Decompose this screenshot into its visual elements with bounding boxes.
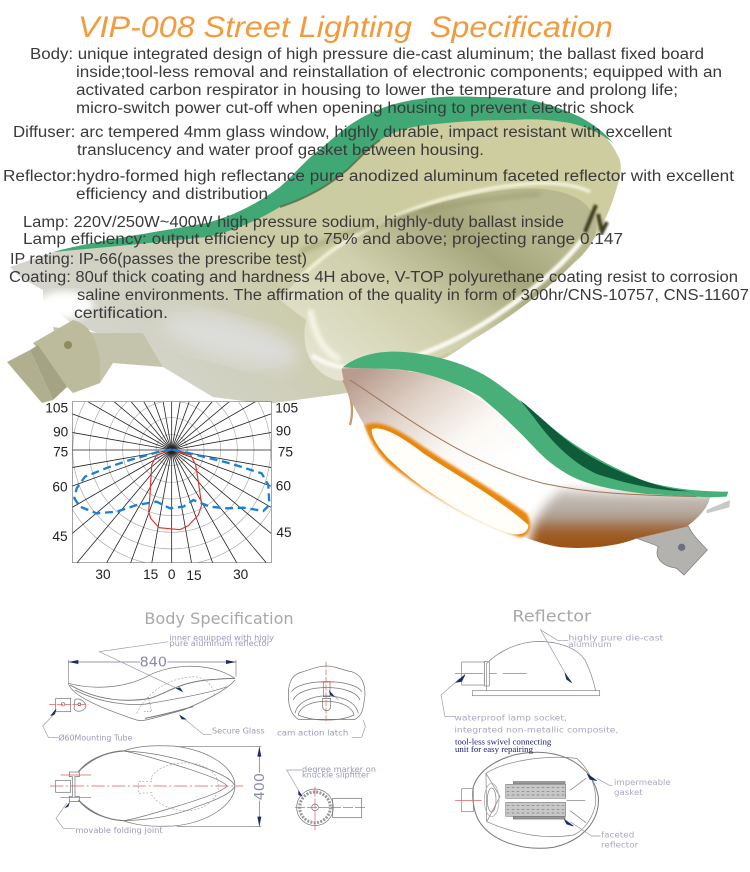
heading: reflector: Reflector xyxy=(512,606,592,625)
chart axis labels: 90 xyxy=(53,425,69,440)
lamp silver housing xyxy=(342,368,710,548)
lamp specification xyxy=(23,214,623,248)
chart axis labels: 15 xyxy=(186,568,202,583)
drawing callouts xyxy=(43,642,365,828)
coating specification: Coating: 80uf thick coating and hardness 4H above, V-TOP polyurethane coating resist to corrosion xyxy=(9,269,738,286)
chart axis labels: 105 xyxy=(275,401,298,416)
chart axis labels: 45 xyxy=(276,525,292,540)
lamp shaded right section xyxy=(523,484,710,548)
IP rating: IP rating: IP-66(passes the prescribe test) xyxy=(10,251,307,268)
body specification: micro-switch power cut-off when opening housing to prevent electric shock xyxy=(76,100,634,117)
drawing annotations: inner equipped with higly xyxy=(169,633,274,642)
front view drawing xyxy=(288,662,365,723)
diffuser specification: translucency and water proof gasket between housing. xyxy=(77,142,484,159)
reflector specification: efficiency and distribution xyxy=(76,186,268,203)
chart axis labels: 75 xyxy=(53,444,69,459)
drawing annotations: Secure Glass xyxy=(212,726,265,735)
body specification: inside;tool-less removal and reinstallation of electronic components; equipped with an xyxy=(76,64,722,81)
drawing annotations: Ø60Mounting Tube xyxy=(58,733,133,742)
reflector annotations: impermeable xyxy=(614,778,671,787)
drawing annotations: degree marker on xyxy=(302,765,376,774)
body specification drawings xyxy=(43,609,376,835)
window glow xyxy=(365,423,530,537)
chart axis labels: 75 xyxy=(278,445,293,460)
diffuser specification xyxy=(13,124,673,159)
specification text xyxy=(3,46,749,322)
drawing annotations: cam action latch xyxy=(277,729,348,738)
white glare patches xyxy=(37,291,93,319)
chart axis labels: 0 xyxy=(168,567,176,582)
blue dashed distribution curve xyxy=(74,449,269,513)
drawing annotations: knuckle slipfitter xyxy=(302,771,370,780)
coating specification xyxy=(9,269,749,322)
drawing annotations: movable folding joint xyxy=(75,826,163,835)
reflector annotations xyxy=(454,634,671,850)
lamp bracket xyxy=(637,526,707,575)
body specification: Body: unique integrated design of high pressure die-cast aluminum; the ballast fixed board xyxy=(30,46,704,63)
top view drawing xyxy=(50,746,243,826)
lamp latch xyxy=(585,205,607,232)
reflector annotations: integrated non-metallic composite, xyxy=(454,726,618,735)
lamp glass xyxy=(280,188,596,381)
diffuser specification: Diffuser: arc tempered 4mm glass window, highly durable, impact resistant with excellent xyxy=(13,124,673,141)
coating specification: saline environments. The affirmation of the quality in form of 300hr/CNS-10757, CNS-11607 xyxy=(77,287,749,304)
reflector annotations: faceted xyxy=(601,831,634,840)
reflector annotations: aluminum xyxy=(568,640,612,649)
swivel connecting note: unit for easy repairing xyxy=(455,745,533,754)
chart axis labels: 15 xyxy=(143,567,159,582)
dimension 840 xyxy=(68,656,236,683)
coating specification: certification. xyxy=(74,305,168,322)
dimension 840: 840 xyxy=(140,656,167,671)
reflector side view xyxy=(455,641,600,696)
green lamp cover xyxy=(53,96,613,252)
reflector drawings xyxy=(441,606,671,850)
lamp latch xyxy=(343,380,368,425)
lamp housing xyxy=(10,96,621,404)
green cover shadow xyxy=(520,400,690,491)
drawing annotations: pure aluminum reflector xyxy=(169,639,271,648)
reflector annotations: highly pure die-cast xyxy=(568,634,663,643)
green lamp cover xyxy=(343,352,728,497)
chart axis labels: 60 xyxy=(52,480,68,495)
chart axis labels: 30 xyxy=(95,567,111,582)
reflector specification: Reflector:hydro-formed high reflectance pure anodized aluminum faceted reflector with excellent xyxy=(3,168,735,185)
reflector specification xyxy=(3,168,735,203)
reflector callouts xyxy=(441,630,613,836)
dimension 400 xyxy=(177,747,268,827)
swivel connecting note: tool-less swivel connecting xyxy=(455,738,551,747)
lit glass window xyxy=(372,428,528,534)
lamp arm and socket xyxy=(7,320,163,403)
polar light distribution chart xyxy=(46,401,298,580)
reflector annotations: waterproof lamp socket, xyxy=(454,714,567,723)
chart axis labels: 105 xyxy=(45,401,68,416)
red distribution curve xyxy=(149,450,202,530)
reflector annotations: reflector xyxy=(601,841,639,850)
chart axis labels: 45 xyxy=(52,529,68,544)
dimension 400: 400 xyxy=(253,773,268,800)
chart axis labels: 30 xyxy=(233,567,249,582)
large street lamp photo xyxy=(7,96,621,404)
reflector annotations: gasket xyxy=(614,788,643,797)
lamp specification: Lamp efficiency: output efficiency up to 75% and above; projecting range 0.147 xyxy=(23,231,623,248)
knuckle drawing xyxy=(295,787,365,830)
drawing annotations xyxy=(58,633,376,835)
small lit street lamp photo xyxy=(342,352,730,575)
body specification xyxy=(30,46,722,117)
lamp specification: Lamp: 220V/250W~400W high pressure sodium, highly-duty ballast inside xyxy=(23,214,564,231)
reflector top view xyxy=(455,752,598,848)
swivel connecting note xyxy=(455,738,551,754)
chart axis labels xyxy=(45,401,298,583)
side view drawing xyxy=(49,666,235,721)
title: VIP-008 Street Lighting Specification xyxy=(78,11,613,44)
chart axis labels: 60 xyxy=(276,479,291,494)
heading: body specification: Body Specification xyxy=(144,609,294,628)
body specification: activated carbon respirator in housing to lower the temperature and prolong life; xyxy=(76,82,678,99)
chart axis labels: 90 xyxy=(276,424,291,439)
